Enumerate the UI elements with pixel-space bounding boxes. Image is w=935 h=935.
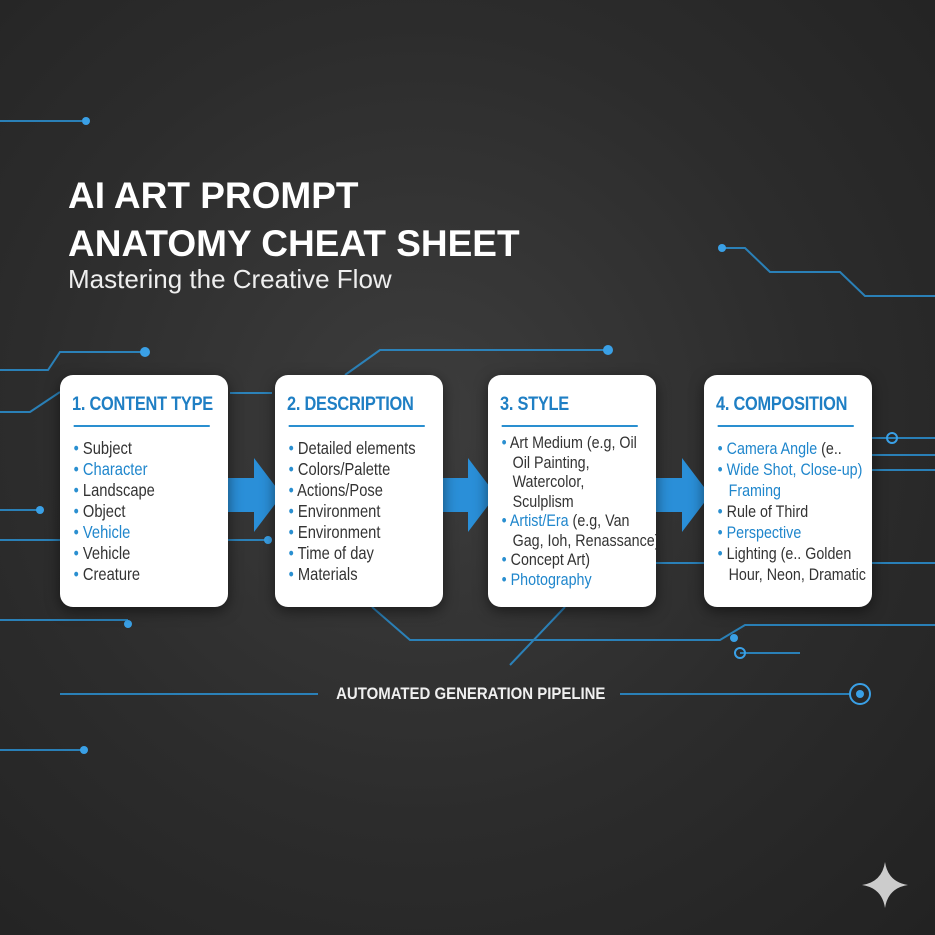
panel: style: Art Medium (e.g, Oil [510, 433, 637, 452]
panel: style: Gag, Ioh, Renassance) [513, 530, 656, 550]
panel: content type: Creature [83, 564, 140, 584]
arrow 2 [443, 458, 488, 532]
panel: style: Sculplism [513, 492, 574, 510]
panel: description: Environment [298, 501, 380, 521]
panel: style: Oil Painting, [513, 452, 590, 472]
panel: style: Photography [511, 570, 592, 588]
panel: description [275, 375, 443, 607]
panel: content type: Vehicle [83, 543, 130, 563]
panel: content type: Object [83, 501, 125, 521]
panel: composition: Hour, Neon, Dramatic [729, 565, 866, 584]
panel: composition: Lighting (e.. Golden [727, 544, 851, 563]
title: ANATOMY CHEAT SHEET [68, 223, 520, 264]
panel: description: Environment [298, 522, 380, 542]
panel: style: Concept Art) [511, 550, 590, 569]
panel: content type: Landscape [83, 480, 155, 500]
subtitle: Mastering the Creative Flow [68, 264, 392, 294]
panel: content type [60, 375, 228, 607]
title [68, 175, 520, 264]
arrow 1 [228, 458, 275, 532]
panel: composition: Rule of Third [727, 502, 808, 521]
panel: content type: Subject [83, 438, 132, 458]
panel: content type: 1. CONTENT TYPE [72, 393, 213, 415]
panel: style: Watercolor, [513, 472, 584, 491]
panel: style: 3. STYLE [500, 393, 569, 415]
panel: style: Artist/Era (e.g, Van [510, 511, 629, 530]
arrow 3 [656, 458, 704, 532]
title: AI ART PROMPT [68, 175, 359, 216]
panel: description: Time of day [298, 543, 374, 563]
panel: description: Actions/Pose [297, 480, 383, 500]
pipeline label: AUTOMATED GENERATION PIPELINE [336, 684, 605, 703]
panel: description: 2. DESCRIPTION [287, 393, 414, 415]
icon: sparkle [862, 862, 908, 908]
panel: content type: Character [83, 459, 147, 479]
panel: description: Materials [298, 564, 358, 584]
panel: style [488, 375, 656, 607]
panel: content type: Vehicle [83, 522, 130, 542]
panel: description: Colors/Palette [298, 459, 390, 479]
panel: description: Detailed elements [298, 438, 416, 458]
panel: composition: Camera Angle (e.. [727, 439, 842, 458]
panel: composition: Wide Shot, Close-up) [727, 460, 862, 479]
panel: composition: Perspective [727, 523, 801, 542]
panel: composition: 4. COMPOSITION [716, 393, 847, 415]
panel: composition: Framing [729, 481, 781, 500]
panel: composition [704, 375, 872, 607]
